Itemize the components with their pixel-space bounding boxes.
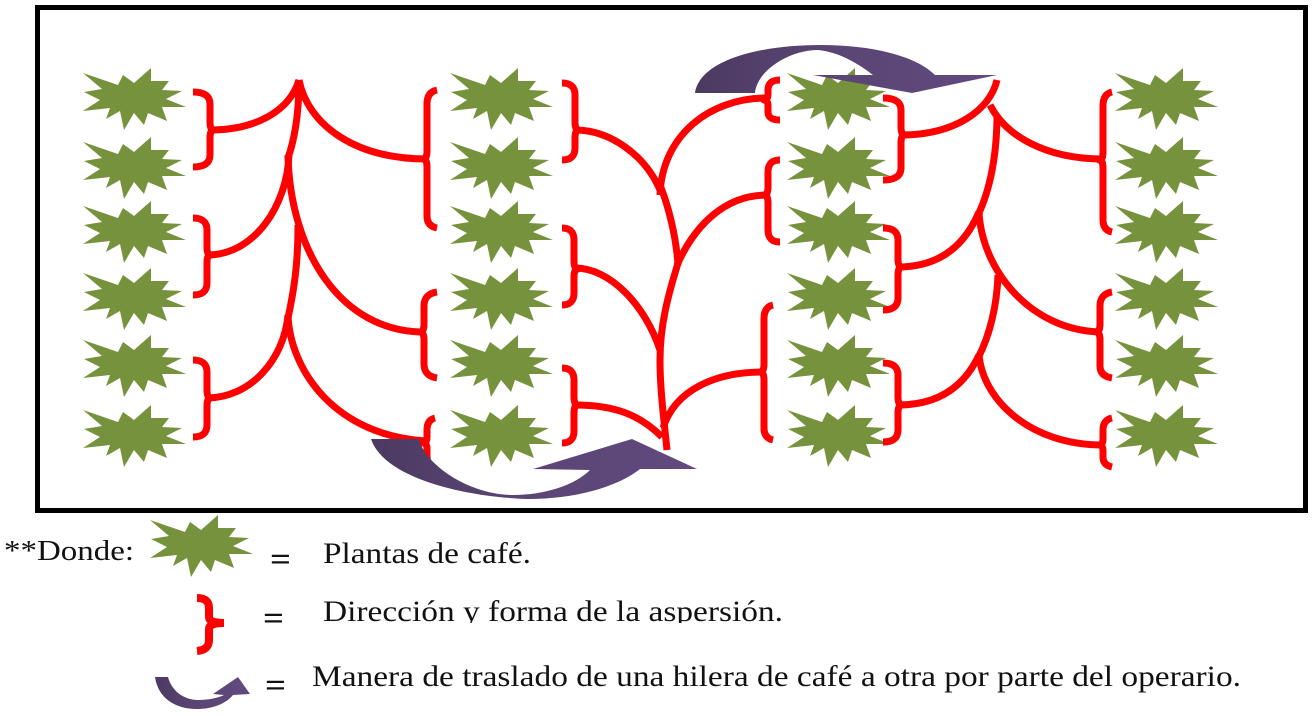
legend text: operator movement: Manera de traslado de una hilera de café a otra por parte del operario. — [312, 660, 1241, 693]
panel: diagram frame — [38, 8, 1306, 510]
column 2 of coffee plants — [450, 68, 553, 467]
equals sign 1: = — [270, 542, 291, 578]
legend heading: **Donde: — [4, 535, 134, 567]
spray pattern: first aisle — [193, 80, 437, 468]
arrow: operator moves along top to next row — [695, 45, 997, 93]
legend icon: coffee plant — [150, 515, 253, 577]
legend — [4, 515, 1241, 709]
legend text: spray direction: Dirección y forma de la aspersión. — [323, 595, 783, 628]
spray pattern: second aisle — [562, 80, 780, 450]
column 1 of coffee plants — [83, 68, 186, 467]
column 3 of coffee plants — [787, 68, 890, 467]
arrow: operator moves along bottom to next row — [371, 439, 697, 499]
clip strip hiding descenders — [320, 623, 790, 635]
column 4 of coffee plants — [1115, 68, 1218, 467]
equals sign 3: = — [265, 668, 286, 704]
legend text: plants: Plantas de café. — [323, 537, 531, 570]
legend icon: red brace — [197, 598, 224, 651]
spray pattern: third aisle — [883, 80, 1112, 467]
legend icon: purple arrow — [155, 677, 250, 709]
equals sign 2: = — [263, 601, 284, 637]
